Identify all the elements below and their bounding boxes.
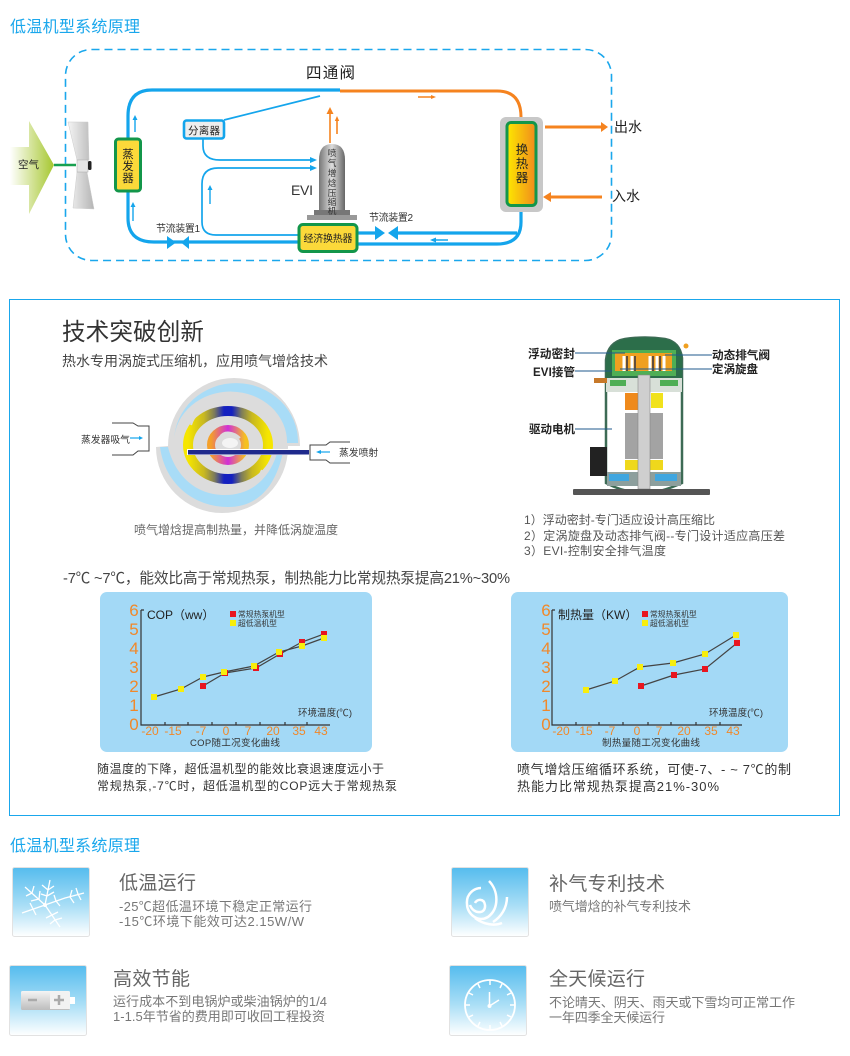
component: EVI compressor: 喷 — [328, 148, 337, 158]
y axis labels: 3 — [129, 658, 139, 677]
chart captions right: 喷气增焓压缩循环系统，可使-7、- ~ 7℃的制 — [517, 762, 791, 777]
chart: heating capacity curve: 制热量随工况变化曲线 — [602, 737, 700, 749]
compressor labels: 驱动电机 — [529, 422, 576, 436]
x axis labels: 43 — [314, 724, 328, 738]
y axis labels — [129, 601, 139, 734]
heading: 技术突破创新 — [62, 319, 204, 346]
feature: all-weather operation — [450, 966, 795, 1036]
yellow series — [151, 635, 327, 700]
subheading: 热水专用涡旋式压缩机，应用喷气增焓技术 — [62, 353, 328, 369]
y axis labels: 6 — [129, 601, 139, 620]
throttle device 1 — [156, 222, 200, 249]
y axis labels: 2 — [541, 677, 551, 696]
red series — [638, 640, 740, 689]
component: economizer: 经济换热器 — [304, 232, 352, 245]
compressor labels: 定涡旋盘 — [712, 362, 758, 376]
throttle device 2: 节流装置2 — [369, 211, 413, 224]
y axis labels: 4 — [541, 639, 551, 658]
component: separator — [184, 120, 224, 138]
feature: high efficiency: 1-1.5年节省的费用即可收回工程投资 — [113, 1009, 325, 1024]
x axis labels: 20 — [266, 724, 280, 738]
compressor feature list — [524, 512, 785, 558]
compressor labels: 浮动密封 — [528, 347, 575, 361]
legend — [642, 609, 697, 628]
yellow series — [583, 632, 739, 693]
legend: 超低温机型 — [238, 618, 277, 628]
x axis labels: 0 — [223, 724, 230, 738]
data lines — [641, 643, 737, 686]
x axis labels: 7 — [245, 724, 252, 738]
suction inlet: 蒸发器吸气 — [81, 433, 130, 446]
component: economizer — [299, 224, 357, 252]
compressor labels: EVI接管 — [533, 365, 575, 379]
feature: patented vapor injection — [452, 868, 691, 936]
injection inlet: 蒸发喷射 — [339, 446, 378, 459]
chart: COP curve: COP（ww） — [147, 608, 214, 622]
title: system principle: 低温机型系统原理 — [10, 18, 140, 36]
chart captions left: 常规热泵,-7℃时，超低温机型的COP远大于常规热泵 — [97, 778, 397, 793]
refrigerant loop orange — [340, 91, 521, 117]
x axis labels: 43 — [726, 724, 740, 738]
compressor feature list: 1）浮动密封-专门适应设计高压缩比 — [524, 512, 715, 527]
x axis labels: -7 — [196, 724, 207, 738]
icon: battery — [10, 966, 86, 1036]
feature: all-weather operation: 不论晴天、阴天、雨天或下雪均可正常工作 — [549, 995, 795, 1010]
component: evaporator: 器 — [122, 172, 134, 185]
y axis labels: 5 — [541, 620, 551, 639]
x axis labels: -20 — [552, 724, 570, 738]
throttle device 2 — [369, 211, 413, 240]
component: EVI compressor: 缩 — [328, 196, 337, 207]
panel: technology breakthrough — [9, 299, 840, 816]
legend — [230, 609, 285, 628]
component: EVI compressor: 机 — [328, 205, 337, 216]
component: EVI compressor — [307, 144, 357, 220]
component: heat exchanger: 热 — [516, 157, 529, 171]
feature: patented vapor injection: 补气专利技术 — [549, 873, 665, 895]
feature: low temperature operation: 低温运行 — [119, 872, 196, 894]
x axis labels: -20 — [141, 724, 159, 738]
compressor labels: 动态排气阀 — [712, 348, 770, 362]
component: EVI compressor: 增 — [328, 167, 336, 178]
component: separator: 分离器 — [188, 124, 220, 137]
label: EVI: EVI — [291, 182, 313, 198]
suction inlet — [81, 423, 149, 455]
compressor cutaway — [573, 338, 710, 495]
x axis labels — [141, 724, 328, 738]
feature: low temperature operation: -25℃超低温环境下稳定正常运行 — [119, 899, 312, 914]
red series — [200, 631, 327, 689]
chart captions right — [517, 762, 791, 794]
icon: clock — [450, 966, 526, 1036]
x axis labels: -7 — [605, 724, 616, 738]
chart: COP curve: 环境温度(℃) — [298, 707, 352, 719]
chart captions left: 随温度的下降，超低温机型的能效比衰退速度远小于 — [97, 761, 384, 776]
icon: air arrow: 空气 — [18, 158, 39, 171]
chart: heating capacity curve: 环境温度(℃) — [709, 707, 763, 719]
icon: snowflake — [12, 868, 90, 936]
x axis labels: 35 — [292, 724, 306, 738]
scroll caption: 喷气增焓提高制热量，并降低涡旋温度 — [134, 522, 338, 537]
efficiency statement: -7℃ ~7℃，能效比高于常规热泵，制热能力比常规热泵提高21%~30% — [63, 570, 510, 587]
component: heat exchanger: 器 — [516, 171, 529, 185]
component: heat exchanger: 换 — [516, 143, 529, 157]
component: evaporator — [116, 139, 140, 191]
y axis labels — [541, 601, 551, 734]
x axis labels: 20 — [677, 724, 691, 738]
component: evaporator: 发 — [122, 159, 134, 173]
separator lines — [202, 96, 320, 235]
component: heat exchanger — [500, 117, 543, 212]
x axis labels — [552, 724, 740, 738]
chart: heating capacity curve: 制热量（KW） — [558, 608, 637, 622]
diagram: system schematic — [10, 50, 642, 260]
feature: high efficiency: 高效节能 — [113, 968, 190, 990]
y axis labels: 2 — [129, 677, 139, 696]
label: four-way valve: 四通阀 — [306, 64, 355, 82]
x axis labels: -15 — [575, 724, 593, 738]
y axis labels: 0 — [129, 715, 139, 734]
icon: fan — [54, 122, 94, 209]
chart captions right: 热能力比常规热泵提高21%-30% — [517, 779, 719, 794]
feature: all-weather operation: 全天候运行 — [549, 968, 645, 990]
water outlet arrow: 出水 — [614, 119, 642, 135]
refrigerant loop blue — [128, 90, 521, 244]
chart captions left — [97, 761, 397, 793]
feature: patented vapor injection: 喷气增焓的补气专利技术 — [549, 899, 691, 914]
y axis labels: 3 — [541, 658, 551, 677]
chart: heating capacity curve — [511, 592, 788, 752]
y axis labels: 6 — [541, 601, 551, 620]
x axis labels: -15 — [164, 724, 182, 738]
icon: swirl — [452, 868, 528, 936]
injection inlet — [310, 442, 378, 463]
chart: COP curve: COP随工况变化曲线 — [190, 737, 280, 749]
feature: high efficiency — [10, 966, 327, 1036]
feature: high efficiency: 运行成本不到电锅炉或柴油锅炉的1/4 — [113, 994, 327, 1009]
y axis labels: 4 — [129, 639, 139, 658]
compressor feature list: 3）EVI-控制安全排气温度 — [524, 543, 666, 558]
component: EVI compressor: 压 — [328, 188, 337, 198]
y axis labels: 5 — [129, 620, 139, 639]
feature: low temperature operation — [12, 868, 312, 936]
feature: all-weather operation: 一年四季全天候运行 — [549, 1010, 665, 1025]
y axis labels: 0 — [541, 715, 551, 734]
throttle device 1: 节流装置1 — [156, 222, 200, 235]
icon: air arrow — [10, 121, 54, 214]
compressor feature list: 2）定涡旋盘及动态排气阀--专门设计适应高压差 — [524, 528, 785, 543]
flow arrows — [130, 95, 448, 242]
compressor labels — [528, 347, 770, 436]
scroll diagram — [156, 378, 309, 513]
x axis labels: 0 — [634, 724, 641, 738]
component: evaporator: 蒸 — [122, 148, 134, 161]
legend: 超低温机型 — [650, 618, 689, 628]
chart: COP curve — [100, 592, 372, 752]
x axis labels: 7 — [656, 724, 663, 738]
legend: 常规热泵机型 — [650, 609, 697, 619]
component: EVI compressor: 焓 — [328, 177, 337, 188]
dashed system boundary — [66, 50, 612, 260]
legend: 常规热泵机型 — [238, 609, 285, 619]
water inlet arrow — [543, 188, 640, 204]
component: EVI compressor: 气 — [328, 157, 337, 168]
data lines — [203, 634, 324, 686]
title: features section: 低温机型系统原理 — [10, 837, 140, 855]
water inlet arrow: 入水 — [612, 188, 640, 204]
x axis labels: 35 — [704, 724, 718, 738]
feature: low temperature operation: -15℃环境下能效可达2.15W/W — [119, 914, 305, 929]
y axis labels: 1 — [541, 696, 551, 715]
y axis labels: 1 — [129, 696, 139, 715]
water outlet arrow — [545, 119, 642, 135]
